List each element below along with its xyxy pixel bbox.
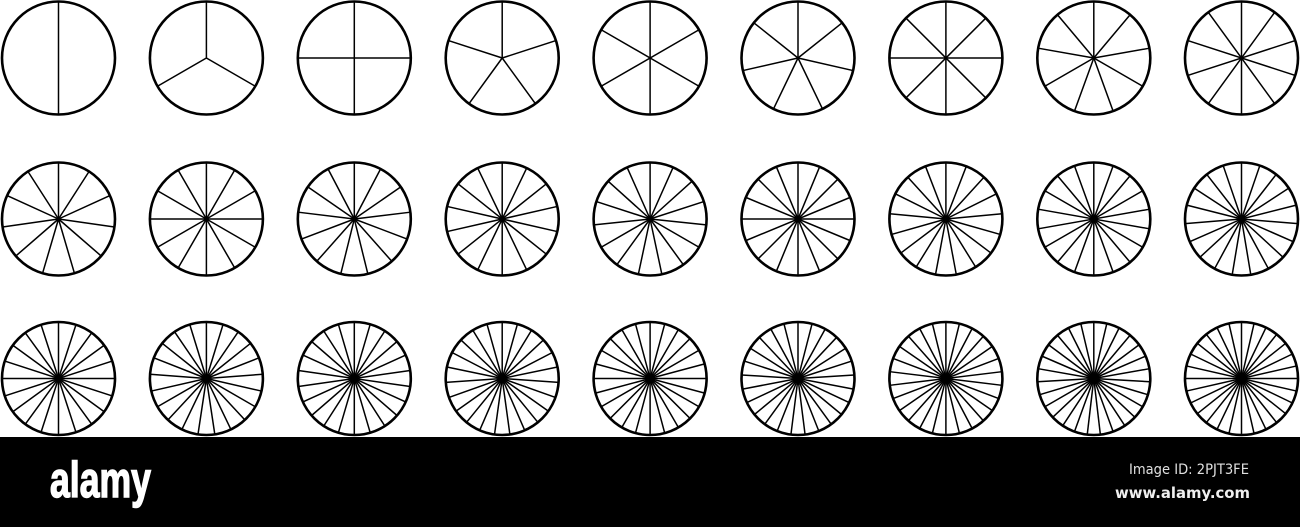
icon: circle 27 segments bbox=[1037, 322, 1150, 435]
icon: circle 7 segments bbox=[742, 2, 854, 114]
icon: circle 8 segments bbox=[889, 2, 1002, 114]
icon: circle 14 segments bbox=[446, 162, 559, 276]
icon: circle 9 segments bbox=[1037, 2, 1150, 114]
icon: circle 17 segments bbox=[889, 162, 1002, 276]
icon: circle 23 segments bbox=[446, 322, 559, 435]
icon: circle 3 segments bbox=[150, 2, 263, 114]
icon: circle 4 segments bbox=[298, 2, 411, 114]
icon: circle 20 segments bbox=[2, 322, 115, 435]
icon: circle 12 segments bbox=[150, 162, 263, 276]
icon: circle 5 segments bbox=[446, 2, 559, 114]
icon: circle 21 segments bbox=[150, 322, 263, 435]
panel: row 1 circles with 2 to 10 segments bbox=[2, 2, 1298, 114]
panel: row 3 circles with 20 to 28 segments bbox=[2, 322, 1298, 435]
logo text: alamy: alamy bbox=[50, 452, 151, 508]
icon: circle 13 segments bbox=[298, 162, 411, 276]
icon: circle 25 segments bbox=[742, 322, 854, 435]
icon: circle 26 segments bbox=[889, 322, 1002, 435]
panel: black footer bar bbox=[0, 437, 1300, 527]
icon: circle 19 segments bbox=[1185, 162, 1298, 276]
icon: circle 10 segments bbox=[1185, 2, 1298, 114]
icon: circle 22 segments bbox=[298, 322, 411, 435]
panel: row 2 circles with 11 to 19 segments bbox=[2, 162, 1298, 276]
icon: circle 18 segments bbox=[1037, 162, 1150, 276]
icon: circle 6 segments bbox=[594, 2, 707, 114]
icon: circle 11 segments bbox=[2, 162, 115, 276]
icon: circle 15 segments bbox=[594, 162, 707, 276]
icon: circle 28 segments bbox=[1185, 322, 1298, 435]
icon: circle 16 segments bbox=[742, 162, 854, 276]
icon: circle 24 segments bbox=[594, 322, 707, 435]
icon: circle 2 segments bbox=[2, 2, 115, 114]
text: image ID: Image ID: 2PJT3FE bbox=[1129, 462, 1249, 478]
text: website: www.alamy.com bbox=[1115, 484, 1250, 502]
